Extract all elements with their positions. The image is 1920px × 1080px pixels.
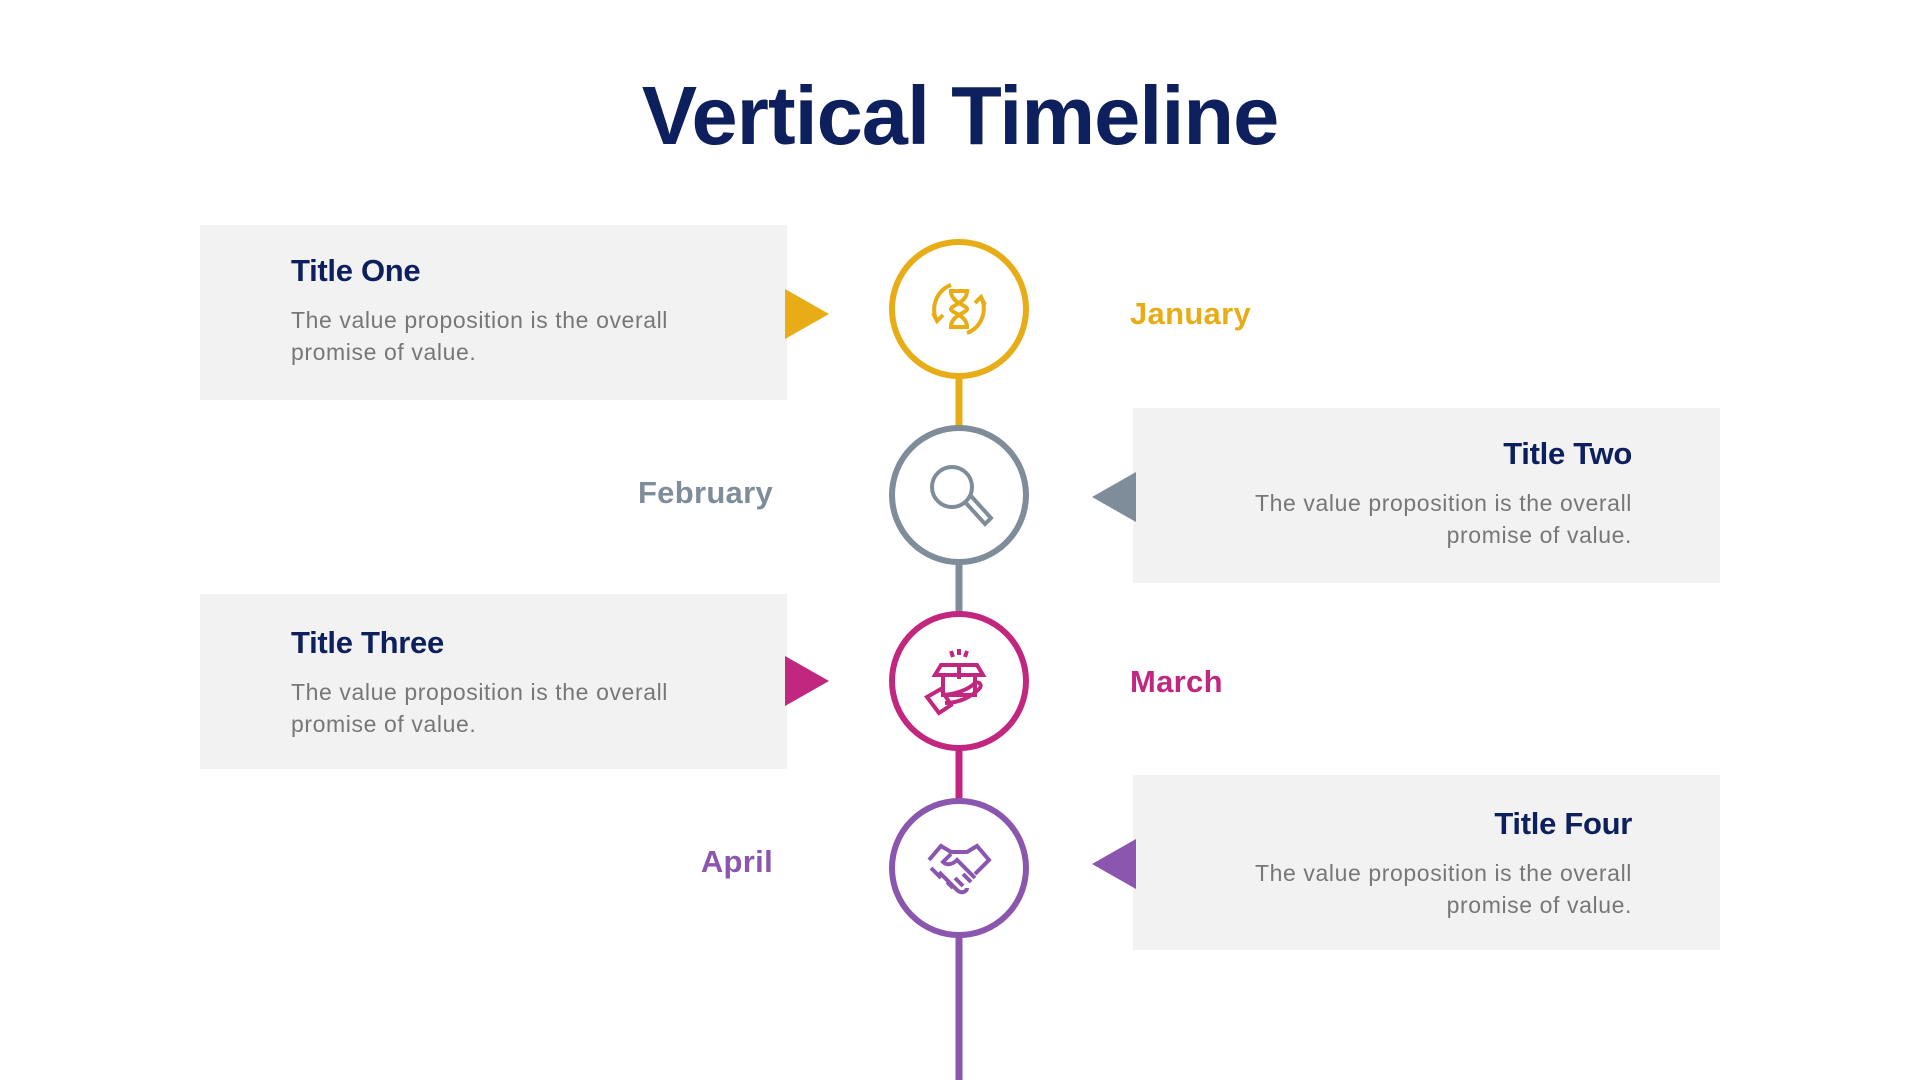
heading: title four: Title Four [1494,806,1632,841]
panel: title one [200,225,787,400]
panel: title three [200,594,787,769]
month: April: April [701,844,773,879]
text block: The value proposition is the overall promise of value. [291,307,668,365]
text block: The value proposition is the overall promise of value. [291,679,668,737]
heading: title three: Title Three [291,625,444,660]
arrow 3 [785,656,829,706]
month: February: February [638,475,773,510]
month: March: March [1130,664,1223,699]
text block: The value proposition is the overall promise of value. [1255,490,1632,548]
panel: title four [1133,775,1720,950]
circle 4: handshake [889,798,1029,938]
title: Vertical Timeline [642,69,1278,162]
arrow 2 [1092,472,1136,522]
heading: title one: Title One [291,253,420,288]
arrow 4 [1092,839,1136,889]
arrow 1 [785,289,829,339]
circle 3: box in hand [889,611,1029,751]
month: January: January [1130,296,1251,331]
heading: title two: Title Two [1503,436,1632,471]
panel: title two [1133,408,1720,583]
circle 1: hourglass [889,239,1029,379]
circle 2: magnifier [889,425,1029,565]
text block: The value proposition is the overall promise of value. [1255,860,1632,918]
